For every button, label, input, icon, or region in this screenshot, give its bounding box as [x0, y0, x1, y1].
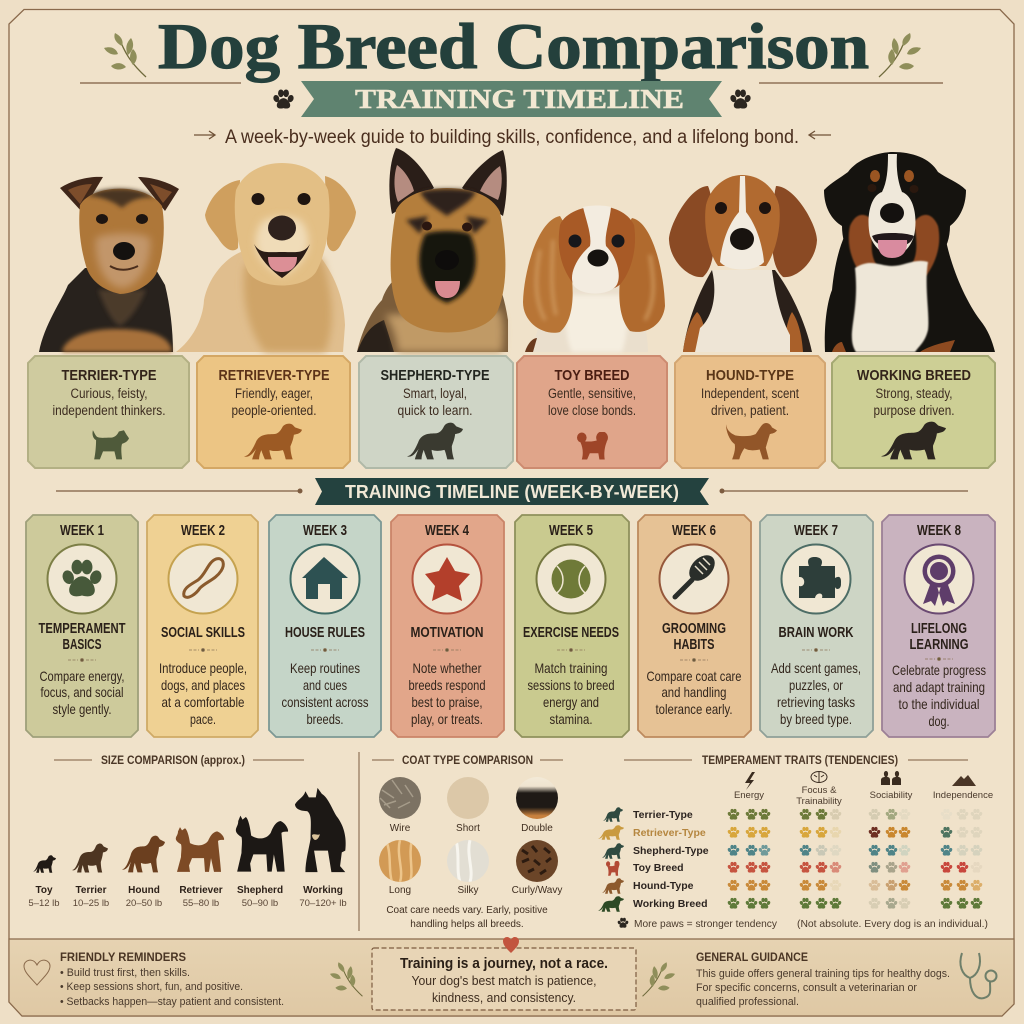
portrait: bernese working dog	[824, 152, 995, 352]
portrait: terrier	[39, 177, 179, 352]
icon: people	[881, 771, 901, 785]
row: retriever-type: Retriever-Type	[633, 827, 706, 839]
panel: hound-type: HOUND-TYPE	[706, 367, 794, 384]
panel: size comparison: Shepherd	[237, 885, 283, 896]
portrait: cavalier toy breed	[523, 206, 665, 352]
panel: hound-type: driven, patient.	[711, 403, 789, 418]
friendly reminders: • Setbacks happen—stay patient and consistent.	[60, 996, 284, 1008]
panel: coat type comparison: Curly/Wavy	[512, 885, 562, 896]
size silhouettes	[33, 855, 56, 873]
icon: stethoscope	[960, 953, 996, 998]
row: working breed	[598, 896, 983, 912]
callout	[372, 948, 636, 1010]
panel: hound-type	[675, 356, 825, 468]
size labels: Toy	[35, 885, 53, 896]
row: terrier-type	[603, 807, 983, 822]
panel: shepherd-type: Smart, loyal,	[403, 386, 467, 401]
footer band	[9, 937, 1014, 1016]
icon: right paw	[729, 89, 752, 109]
panel: week 8: Celebrate progress	[892, 662, 986, 678]
icon: heart	[503, 937, 519, 953]
panel: size comparison: 70–120+ lb	[299, 898, 347, 909]
panel: coat type comparison: Wire	[390, 823, 411, 834]
panel: size comparison: 50–90 lb	[242, 898, 278, 909]
icon: rope leash	[184, 559, 223, 597]
panel: size comparison: 5–12 lb	[28, 898, 60, 909]
swatch: curly	[516, 840, 558, 882]
panel: week 2: WEEK 2	[181, 523, 225, 539]
panel: week 6: Compare coat care	[646, 668, 742, 684]
panel: week 7: Add scent games,	[771, 660, 861, 676]
panel: week 6: HABITS	[674, 637, 715, 653]
icon: right sprig	[643, 962, 675, 996]
icon: mountain	[952, 775, 976, 786]
icon: terrier silhouette	[92, 430, 129, 459]
panel: week 3: and cues	[303, 677, 347, 693]
panel: week 3	[269, 515, 381, 737]
icon: left sprig	[330, 962, 362, 996]
panel: toy breed: TOY BREED	[554, 367, 630, 384]
section banner: training timeline	[56, 478, 968, 505]
panel: week 7: BRAIN WORK	[778, 625, 854, 641]
panel: size comparison: 10–25 lb	[73, 898, 109, 909]
panel: terrier-type: Curious, feisty,	[70, 386, 148, 401]
panel: week 4: Note whether	[412, 660, 482, 676]
icon: paw	[61, 560, 103, 596]
panel: temperament traits: Trainability	[796, 796, 842, 807]
callout: Training is a journey, not a race.	[400, 956, 608, 972]
panel: toy breed	[517, 356, 667, 468]
portrait: german shepherd	[357, 148, 508, 352]
panel: retriever-type	[197, 356, 350, 468]
friendly reminders	[60, 950, 284, 1008]
general guidance: qualified professional.	[696, 996, 799, 1008]
panel: size comparison: Working	[303, 885, 343, 896]
panel: temperament traits: TEMPERAMENT TRAITS (TENDENCIES)	[702, 755, 898, 767]
panel: coat type comparison: Double	[521, 823, 553, 834]
panel: week 5: energy and	[543, 694, 599, 710]
panel: week 3: Keep routines	[290, 660, 360, 676]
panel: temperament traits: Independence	[933, 790, 993, 801]
general guidance: For specific concerns, consult a veterinarian or	[696, 982, 917, 994]
icon: puzzle piece	[799, 557, 841, 598]
panel: week 6: and handling	[662, 684, 726, 700]
icon: right sprig	[879, 33, 921, 77]
panel: week 8	[882, 515, 995, 737]
portrait: beagle hound	[669, 175, 817, 352]
row: retriever-type	[598, 825, 983, 840]
icon: star	[425, 557, 470, 601]
panel: coat type comparison: Silky	[457, 885, 479, 896]
row: hound-type: Hound-Type	[633, 880, 694, 892]
panel: week 8: WEEK 8	[917, 523, 961, 539]
card ornaments	[68, 648, 953, 662]
panel: week 8: and adapt training	[893, 679, 985, 695]
icon: house	[302, 557, 348, 599]
tagline: A week-by-week guide to building skills, confidence, and a lifelong bond.	[225, 127, 799, 148]
panel: week 7	[760, 515, 873, 737]
panel: week 2: pace.	[190, 711, 216, 727]
panel: temperament traits: Focus &	[802, 785, 837, 796]
panel: week 7: by breed type.	[780, 711, 852, 727]
panel: size comparison: Hound	[128, 885, 160, 896]
panel: toy breed: Gentle, sensitive,	[548, 386, 636, 401]
panel: week 1: Compare energy,	[40, 668, 124, 684]
panel: week 1: focus, and social	[40, 684, 124, 700]
panel: coat type comparison: COAT TYPE COMPARISON	[402, 755, 533, 767]
panel: week 5: stamina.	[550, 711, 592, 727]
header rules	[80, 82, 943, 84]
panel: working breed: WORKING BREED	[857, 367, 971, 384]
row: shepherd-type	[602, 843, 983, 859]
panel: week 4: best to praise,	[412, 694, 482, 710]
panel: terrier-type	[28, 356, 189, 468]
panel: week 7: retrieving tasks	[777, 694, 855, 710]
swatch: wire	[379, 777, 421, 819]
swatch: short	[447, 777, 489, 819]
friendly reminders: FRIENDLY REMINDERS	[60, 950, 186, 964]
swatch: long	[379, 840, 421, 882]
panel: week 3: WEEK 3	[303, 523, 347, 539]
panel: terrier-type: independent thinkers.	[52, 403, 166, 418]
callout: kindness, and consistency.	[432, 991, 576, 1005]
general guidance	[696, 950, 950, 1008]
portrait: golden retriever	[176, 163, 356, 352]
panel: week 3: HOUSE RULES	[285, 625, 365, 641]
panel: retriever-type: RETRIEVER-TYPE	[218, 367, 330, 384]
panel: size comparison: 20–50 lb	[126, 898, 162, 909]
panel: week 5: sessions to breed	[528, 677, 614, 693]
panel: week 5: EXERCISE NEEDS	[523, 625, 619, 641]
panel: size comparison: Terrier	[76, 885, 107, 896]
panel: retriever-type: people-oriented.	[232, 403, 316, 418]
legend	[617, 918, 988, 930]
panel: week 3: consistent across	[282, 694, 368, 710]
panel: week 6: tolerance early.	[656, 701, 732, 717]
panel: week 6: WEEK 6	[672, 523, 716, 539]
friendly reminders: • Keep sessions short, fun, and positive.	[60, 981, 243, 993]
panel: working breed	[832, 356, 995, 468]
arrow: left	[194, 131, 215, 139]
title: Dog Breed Comparison	[158, 11, 869, 83]
swatch: double	[516, 777, 558, 819]
icon: grooming brush	[675, 550, 720, 597]
panel: week 7: puzzles, or	[789, 677, 843, 693]
arrow: right	[809, 131, 831, 139]
icon: tennis ball	[552, 560, 590, 598]
callout: Your dog's best match is patience,	[412, 974, 596, 988]
icon: brain	[811, 772, 827, 782]
subtitle banner: TRAINING TIMELINE	[355, 84, 684, 114]
panel: hound-type: Independent, scent	[701, 386, 799, 401]
panel: week 7: WEEK 7	[794, 523, 838, 539]
general guidance: GENERAL GUIDANCE	[696, 950, 808, 964]
general guidance: This guide offers general training tips for healthy dogs.	[696, 968, 950, 980]
panel: size comparison: Retriever	[179, 885, 223, 896]
panel: week 4: play, or treats.	[411, 711, 483, 727]
panel: week 8: dog.	[928, 713, 950, 729]
panel: week 8: LIFELONG	[911, 621, 967, 637]
icon: ribbon rosette	[922, 554, 956, 606]
panel: week 8: LEARNING	[910, 637, 968, 653]
panel: week 5	[515, 515, 629, 737]
icon: left paw	[272, 89, 295, 109]
panel: week 5: WEEK 5	[549, 523, 593, 539]
icon: heart outline	[24, 960, 50, 985]
panel: week 2: at a comfortable	[162, 694, 245, 710]
section banner: training timeline: TRAINING TIMELINE (WEEK-BY-WEEK)	[345, 482, 679, 502]
icon: energy bolt	[745, 772, 755, 790]
legend: More paws = stronger tendency	[634, 918, 778, 930]
header	[80, 11, 943, 148]
subtitle banner	[301, 81, 722, 117]
swatch: silky	[447, 840, 489, 882]
panel: retriever-type: Friendly, eager,	[235, 386, 313, 401]
panel: size comparison: SIZE COMPARISON (approx.)	[101, 755, 245, 767]
panel: coat type comparison: Coat care needs vary. Early, positive	[386, 905, 548, 916]
panel: week 2: Introduce people,	[159, 660, 247, 676]
panel: shepherd-type: SHEPHERD-TYPE	[380, 367, 490, 384]
panel: week 2: dogs, and places	[161, 677, 245, 693]
panel: coat type comparison: Long	[389, 885, 411, 896]
panel: coat type comparison	[372, 755, 563, 930]
panel: week 1	[26, 515, 138, 737]
panel: week 3: breeds.	[306, 711, 344, 727]
panel: week 1: style gently.	[52, 701, 112, 717]
panel: terrier-type: TERRIER-TYPE	[62, 367, 156, 384]
panel: size comparison: 55–80 lb	[183, 898, 219, 909]
panel: coat type comparison: Short	[456, 823, 480, 834]
panel: week 5: Match training	[534, 660, 608, 676]
row: toy breed: Toy Breed	[633, 862, 684, 874]
panel: week 6: GROOMING	[662, 621, 726, 637]
panel: week 4: WEEK 4	[425, 523, 469, 539]
panel: week 2: SOCIAL SKILLS	[161, 625, 245, 641]
panel: week 4: breeds respond	[408, 677, 486, 693]
icon: working silhouette	[881, 422, 946, 459]
row: terrier-type: Terrier-Type	[633, 809, 693, 821]
icon: retriever silhouette	[244, 424, 302, 459]
row: hound-type	[602, 878, 983, 894]
panel: temperament traits: Energy	[734, 790, 764, 801]
panel: week 1: WEEK 1	[60, 523, 104, 539]
panel: temperament traits: Sociability	[870, 790, 913, 801]
panel: week 4	[391, 515, 504, 737]
icon: shepherd silhouette	[407, 423, 463, 459]
row: toy breed	[606, 861, 983, 876]
panel: working breed: purpose driven.	[874, 403, 954, 418]
panel: week 1: TEMPERAMENT	[38, 621, 126, 637]
panel: shepherd-type: quick to learn.	[398, 403, 472, 418]
panel: working breed: Strong, steady,	[876, 386, 952, 401]
panel: size comparison	[28, 755, 347, 909]
icon: hound silhouette	[726, 423, 777, 459]
row: working breed: Working Breed	[633, 898, 707, 910]
panel: week 4: MOTIVATION	[410, 625, 484, 641]
panel: coat type comparison: handling helps all breeds.	[410, 919, 524, 930]
icon: left sprig	[104, 33, 146, 77]
panel: week 6	[638, 515, 751, 737]
legend: (Not absolute. Every dog is an individual.)	[797, 918, 988, 930]
panel: week 1: BASICS	[62, 637, 102, 653]
panel: temperament traits	[598, 755, 993, 930]
icon: toy silhouette	[577, 431, 608, 459]
panel: toy breed: love close bonds.	[548, 403, 636, 418]
panel: week 2	[147, 515, 258, 737]
panel: week 8: to the individual	[898, 696, 980, 712]
friendly reminders: • Build trust first, then skills.	[60, 967, 190, 979]
row: shepherd-type: Shepherd-Type	[633, 845, 709, 857]
panel: shepherd-type	[359, 356, 513, 468]
